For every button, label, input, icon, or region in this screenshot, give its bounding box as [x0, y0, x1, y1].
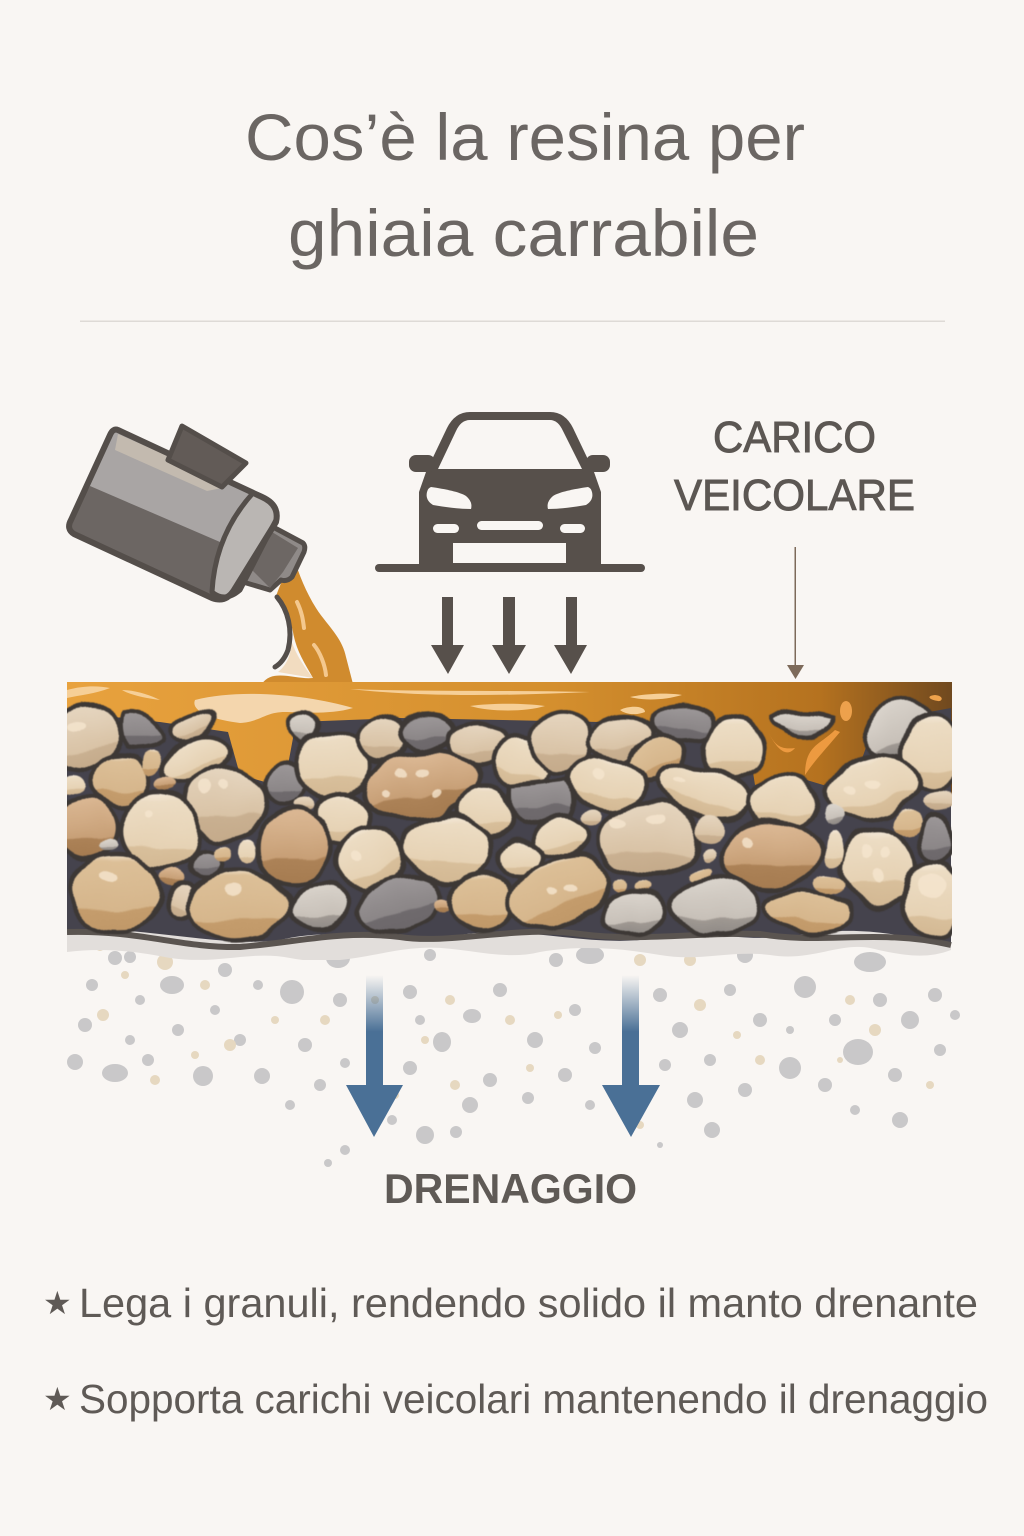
bullet: sopporta carichi: Sopporta carichi veicolari mantenendo il drenaggio — [79, 1376, 988, 1422]
arrows: vehicle load — [431, 597, 587, 674]
gravel bed — [67, 708, 951, 945]
label: carico veicolare: VEICOLARE — [674, 471, 915, 520]
label: drenaggio: DRENAGGIO — [384, 1165, 637, 1212]
shadow under gravel — [67, 931, 951, 960]
arrows: drainage — [346, 975, 660, 1137]
title: ghiaia carrabile — [288, 196, 759, 270]
bullet: lega i granuli: ★ — [43, 1285, 72, 1321]
stone highlights — [70, 723, 946, 899]
icon: car on ground line — [375, 412, 645, 572]
title: Cos’è la resina per — [245, 100, 805, 174]
title — [245, 100, 805, 270]
panel: resin and gravel cross-section — [42, 682, 962, 961]
gravel stones — [42, 690, 962, 942]
bullet: lega i granuli: Lega i granuli, rendendo solido il manto drenante — [79, 1280, 978, 1326]
icon: resin bottle pouring — [60, 426, 353, 684]
soil dots — [67, 935, 960, 1167]
label: carico veicolare: CARICO — [713, 413, 876, 462]
resin layer — [67, 682, 952, 802]
arrow: thin load pointer — [787, 547, 804, 679]
bullet: sopporta carichi: ★ — [43, 1381, 72, 1417]
label: carico veicolare — [674, 413, 915, 520]
